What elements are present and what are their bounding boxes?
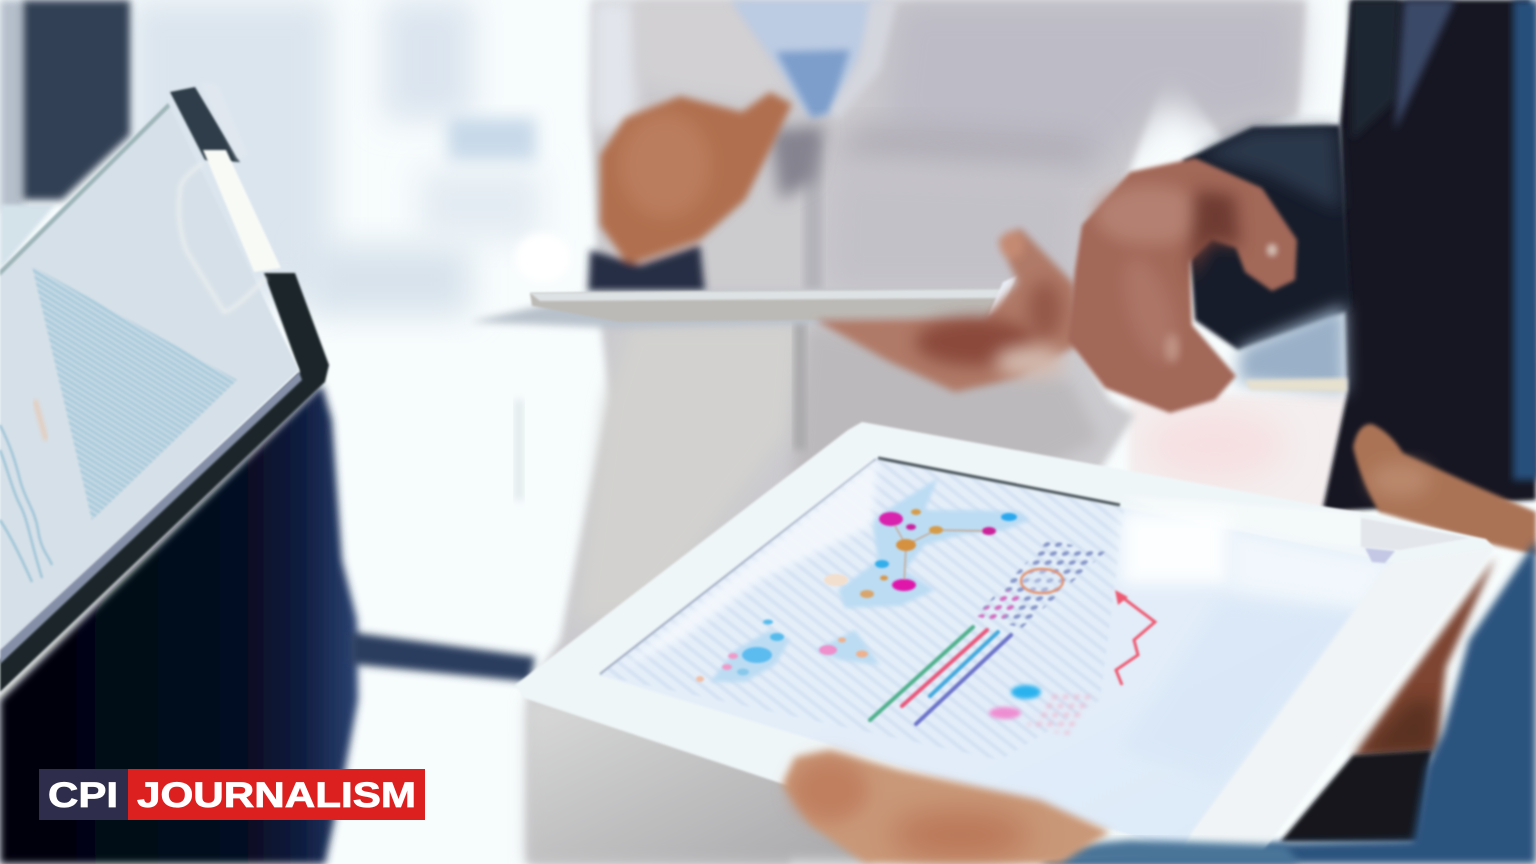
hand beneath middle tablet xyxy=(815,228,1078,392)
sleeve cuff at bottom xyxy=(1050,840,1300,864)
thumb at right xyxy=(1353,424,1536,555)
central person: grey jacket xyxy=(527,0,1306,864)
world map blobs xyxy=(710,478,1030,682)
clipboard board xyxy=(0,273,329,692)
faint text lines on screen xyxy=(1120,600,1360,780)
right person: dark suit xyxy=(1183,0,1536,512)
dark background at lower right xyxy=(1280,750,1432,842)
tablet screen xyxy=(599,458,1395,850)
dot matrix chart xyxy=(975,540,1105,628)
logo: CPI Journalism xyxy=(39,769,425,820)
shirt xyxy=(730,0,883,118)
purple sliver under grey bar xyxy=(1365,548,1395,563)
blue sleeve at lower right xyxy=(1040,540,1536,864)
logo text CPI: CPI xyxy=(48,776,118,815)
metal clip xyxy=(203,150,281,272)
map data points xyxy=(696,509,1017,682)
paper sheet xyxy=(0,103,299,650)
logo red tile xyxy=(128,769,425,820)
bar chart on paper xyxy=(32,266,237,520)
pale sheet next to clip xyxy=(200,82,248,160)
hand behind lower tablet xyxy=(1353,557,1496,757)
dark blue horizontal table leg xyxy=(350,632,535,682)
line chart on paper xyxy=(0,425,52,582)
logo text JOURNALISM: JOURNALISM xyxy=(137,776,416,815)
tablet body xyxy=(515,422,1494,860)
dark navy trousers at lower left xyxy=(0,385,358,864)
lower tablet with data dashboard xyxy=(515,422,1494,860)
shadow at jacket opening xyxy=(770,125,825,200)
colored bar lines xyxy=(870,627,1011,724)
middle tablet, held horizontally xyxy=(470,275,1018,328)
lapel xyxy=(830,0,897,120)
screen glare right xyxy=(1122,512,1230,584)
small blue and pink blobs with grid xyxy=(989,685,1097,735)
screen dark top edge xyxy=(878,458,1120,505)
grey bar at tablet top right xyxy=(1361,518,1470,550)
blurred dark tie at top left xyxy=(23,0,130,200)
clipboard top clip plate xyxy=(170,87,240,162)
hand holding pen on jacket xyxy=(588,92,792,292)
clipboard with printed charts xyxy=(0,82,329,692)
thumb in foreground at bottom xyxy=(782,750,1110,864)
pointing hand xyxy=(1068,158,1297,413)
screen dark left edge xyxy=(600,459,876,674)
logo dark tile xyxy=(39,769,128,820)
orange mark on paper xyxy=(35,400,46,440)
bezel right side xyxy=(1190,548,1494,850)
red trend line xyxy=(1115,590,1155,685)
screen glare top left xyxy=(620,458,878,668)
